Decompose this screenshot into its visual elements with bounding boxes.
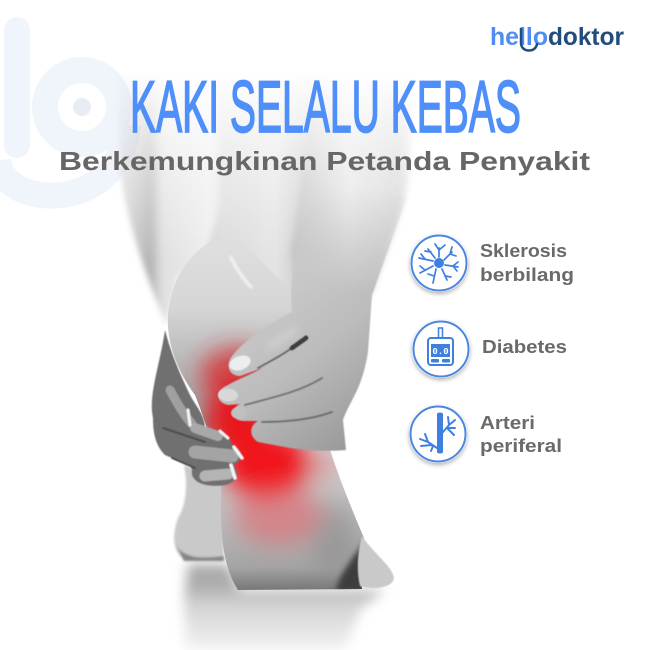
sole ground line xyxy=(238,589,362,591)
icon: glucose meter xyxy=(412,320,470,378)
tendon highlight xyxy=(230,256,252,288)
floor shadow xyxy=(184,564,385,650)
watermark logo xyxy=(0,30,128,196)
back foot xyxy=(174,465,224,561)
toe xyxy=(358,536,394,588)
arch shadow xyxy=(333,542,362,590)
subtitle: Berkemungkinan Petanda Penyakit xyxy=(59,146,590,176)
left hand under foot xyxy=(152,330,242,486)
icon: glucose meter: 0.0 xyxy=(432,347,449,357)
item: Arteri periferal xyxy=(409,405,562,463)
fingernails xyxy=(218,353,253,419)
logo: hellodoktor: doktor xyxy=(548,23,624,51)
sole side shading xyxy=(311,502,359,578)
logo: hellodoktor: hello xyxy=(490,23,548,51)
logo: hellodoktor xyxy=(490,23,624,51)
icon: artery xyxy=(409,405,467,463)
label: Sklerosis xyxy=(480,241,567,261)
right hand xyxy=(218,210,401,452)
label: Arteri xyxy=(480,413,535,433)
item: Arteri periferal: periferal xyxy=(480,436,562,456)
item: Diabetes xyxy=(412,320,567,378)
photo: hands holding foot xyxy=(118,60,413,650)
red pain area xyxy=(200,347,334,545)
icon: neuron xyxy=(410,234,468,292)
item: Sklerosis berbilang xyxy=(410,234,574,292)
foot: heel and sole xyxy=(168,242,364,590)
label: Diabetes xyxy=(482,337,567,357)
legs fading upward xyxy=(120,92,410,322)
item: Sklerosis berbilang: berbilang xyxy=(480,265,574,285)
